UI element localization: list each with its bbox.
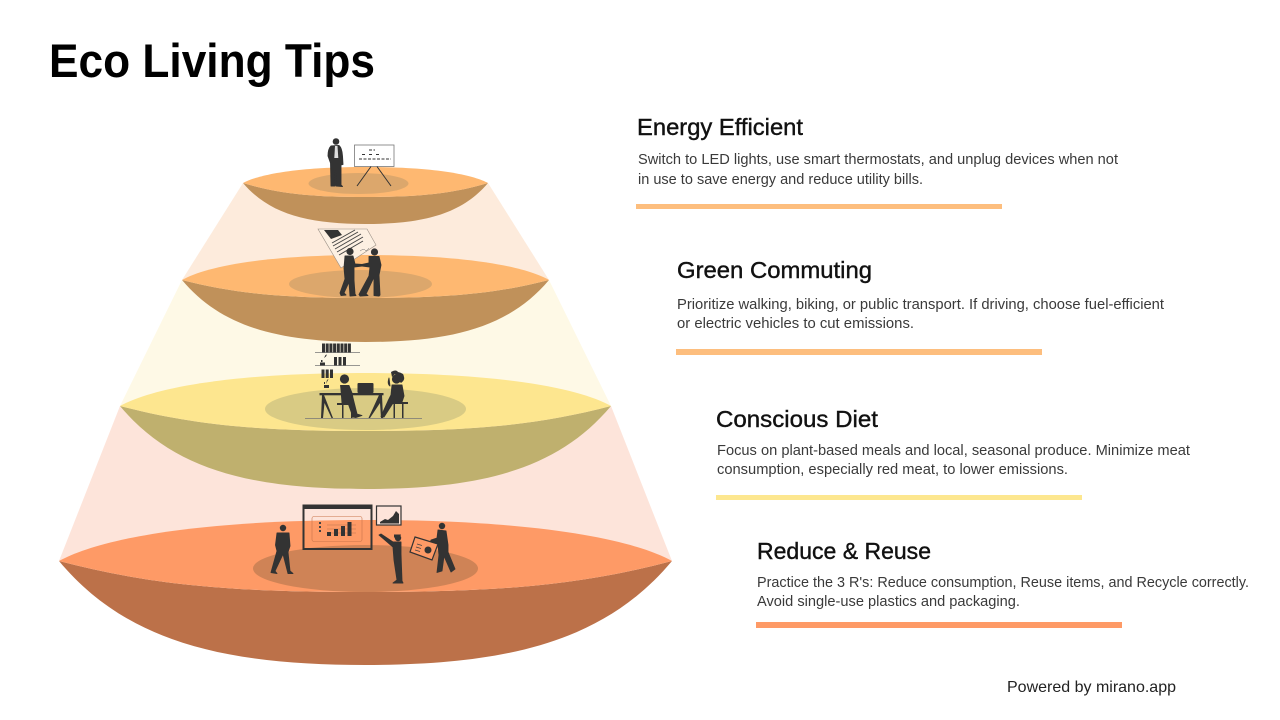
icon: man at board bbox=[328, 138, 394, 186]
icon: contract handshake bbox=[318, 229, 381, 296]
tier 2: green commuting bbox=[182, 229, 549, 342]
light beam: top bbox=[182, 183, 549, 280]
tip: conscious diet bbox=[716, 406, 1190, 500]
tip: conscious diet: consumption, especially red meat, to lower emissions. bbox=[717, 462, 1068, 478]
tip: energy efficient: in use to save energy and reduce utility bills. bbox=[638, 172, 923, 188]
pyramid diagram bbox=[59, 138, 672, 665]
tip: conscious diet: Conscious Diet bbox=[716, 406, 879, 432]
title: Eco Living Tips bbox=[49, 34, 375, 87]
tier 1: energy efficient bbox=[243, 138, 488, 224]
light beam: middle bbox=[120, 280, 611, 406]
tip: energy efficient: Switch to LED lights, use smart thermostats, and unplug devices when not bbox=[638, 152, 1118, 168]
tier 3: conscious diet bbox=[120, 344, 611, 489]
tip: reduce and reuse bbox=[756, 538, 1249, 628]
tip: green commuting: Green Commuting bbox=[677, 257, 872, 283]
tip: energy efficient: Energy Efficient bbox=[637, 114, 804, 140]
tip: green commuting: Prioritize walking, biking, or public transport. If driving, choose fuel-efficient bbox=[677, 297, 1164, 313]
tip: conscious diet: Focus on plant-based meals and local, seasonal produce. Minimize meat bbox=[717, 443, 1190, 459]
tip: energy efficient bbox=[636, 114, 1118, 209]
tip: reduce and reuse: Avoid single-use plastics and packaging. bbox=[757, 594, 1020, 610]
tip: reduce and reuse: Reduce & Reuse bbox=[757, 538, 931, 564]
tip: green commuting bbox=[676, 257, 1164, 355]
tier 4: reduce and reuse bbox=[59, 505, 672, 665]
icon: people at desk with shelves bbox=[305, 344, 422, 418]
tip: green commuting: or electric vehicles to cut emissions. bbox=[677, 316, 914, 332]
light beam: bottom bbox=[59, 406, 672, 561]
footer credit: Powered by mirano.app bbox=[1007, 679, 1176, 696]
tip: reduce and reuse: Practice the 3 R's: Reduce consumption, Reuse items, and Recycle correctly. bbox=[757, 575, 1249, 591]
icon: presentation with charts bbox=[271, 505, 455, 583]
